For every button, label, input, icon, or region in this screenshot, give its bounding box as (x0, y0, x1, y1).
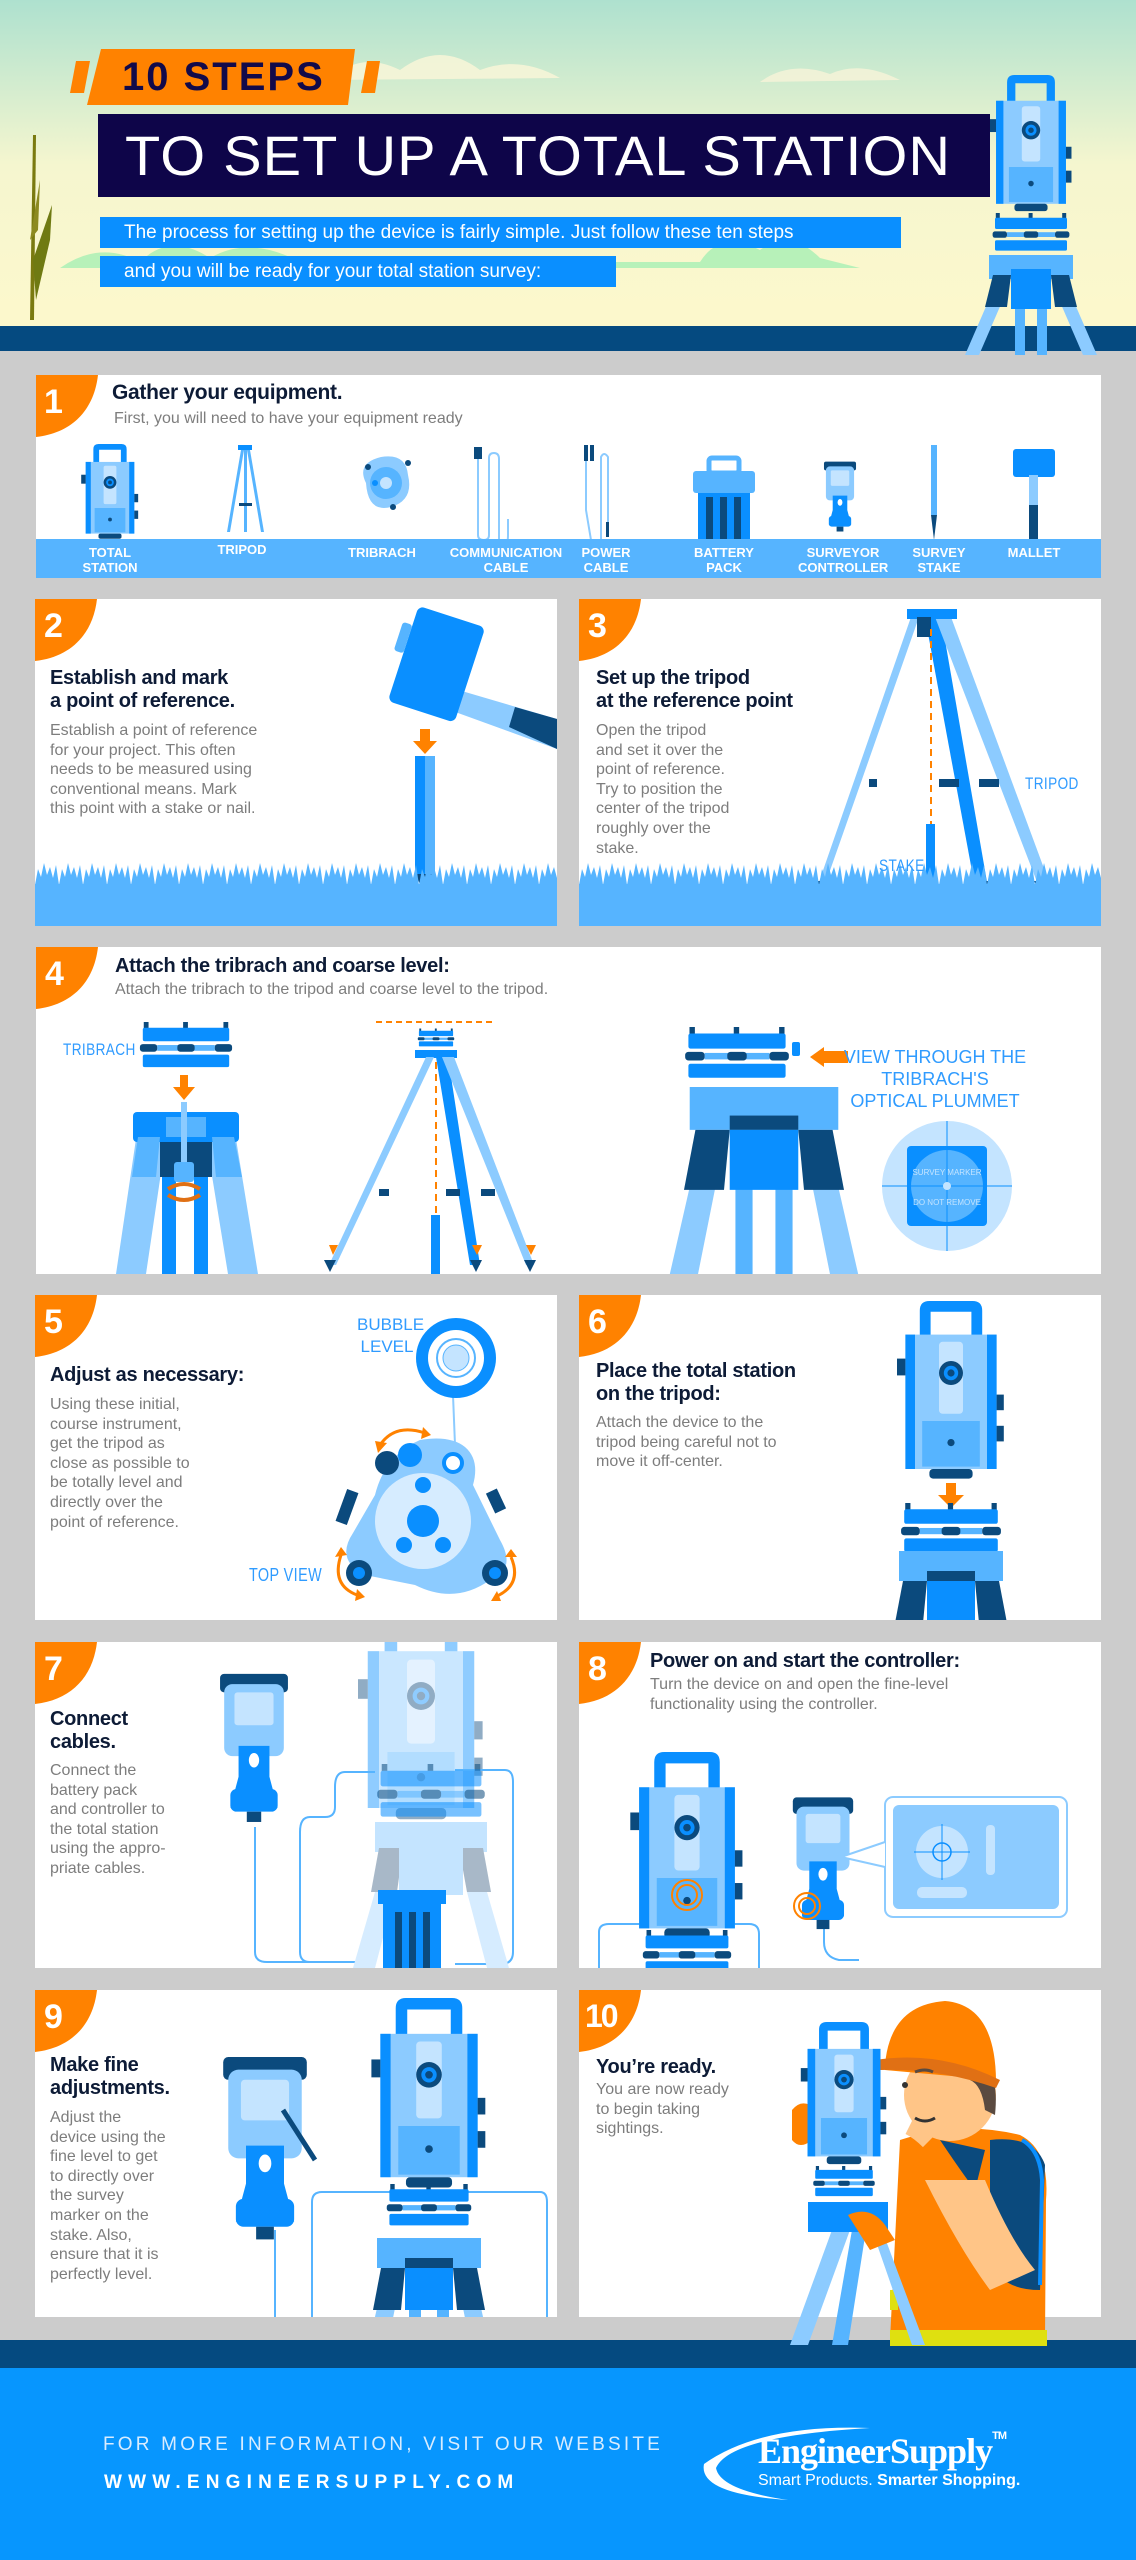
heading: Make fine (50, 2054, 138, 2076)
panel: step 5 adjust (35, 1295, 557, 1620)
body text: to begin taking (596, 2101, 700, 2118)
footer (0, 2368, 1136, 2560)
body text: stake. Also, (50, 2227, 132, 2244)
body text: needs to be measured using (50, 761, 252, 778)
logo (700, 2424, 1040, 2502)
panel: step 10 ready (579, 1990, 1101, 2317)
step number 5 (35, 1295, 97, 1357)
body text: conventional means. Mark (50, 781, 237, 798)
equipment labels: BATTERY (694, 545, 754, 560)
step number 10 (579, 1990, 641, 2052)
equipment labels: SURVEYOR (807, 545, 879, 560)
equipment labels: CABLE (584, 560, 628, 575)
subtitle: and you will be ready for your total station survey: (124, 261, 541, 282)
illustration: bubble level and tribrach top view (335, 1318, 517, 1601)
label: bubble level: LEVEL (361, 1337, 413, 1356)
label: tribrach: TRIBRACH (63, 1040, 136, 1059)
label: optical plummet: VIEW THROUGH THE (844, 1047, 1026, 1067)
body text: point of reference. (50, 1514, 179, 1531)
step number 8: 8 (588, 1650, 607, 1688)
body text: Open the tripod (596, 722, 706, 739)
footer text: FOR MORE INFORMATION, VISIT OUR WEBSITE (103, 2434, 663, 2455)
equipment labels: TRIBRACH (348, 545, 416, 560)
heading: Connect (50, 1708, 128, 1730)
header background (0, 0, 1136, 351)
body text: roughly over the (596, 820, 711, 837)
panel: step 9 fine adjustments (35, 1990, 557, 2317)
title banner: TO SET UP A TOTAL STATION (125, 124, 951, 187)
body text: marker on the (50, 2207, 149, 2224)
step number 7 (35, 1642, 97, 1704)
panel: step 7 connect cables (35, 1642, 557, 1968)
heading: Power on and start the controller: (650, 1650, 960, 1672)
body text: be totally level and (50, 1474, 183, 1491)
subtext: First, you will need to have your equipment ready (114, 410, 463, 427)
step number 6: 6 (588, 1303, 607, 1341)
body text: directly over the (50, 1494, 163, 1511)
heading: Set up the tripod (596, 667, 750, 689)
heading: Establish and mark (50, 667, 228, 689)
body text: using the appro- (50, 1840, 166, 1857)
body text: course instrument, (50, 1416, 182, 1433)
step number 8 (579, 1642, 641, 1704)
step number 2: 2 (44, 607, 63, 645)
equipment labels: SURVEY STAKE (912, 545, 966, 575)
body text: tripod being careful not to (596, 1434, 777, 1451)
label: top view: TOP VIEW (249, 1565, 322, 1585)
body text (50, 1762, 166, 1877)
heading: Place the total station (596, 1360, 796, 1382)
body text: Using these initial, (50, 1396, 180, 1413)
subtitle (100, 217, 901, 287)
illustration: tripod over stake (579, 609, 1101, 926)
logo: Smart Products. Smarter Shopping. (758, 2472, 1020, 2489)
equipment labels (82, 542, 1060, 578)
step number 6 (579, 1295, 641, 1357)
heading: Adjust as necessary: (50, 1364, 244, 1386)
body text: Adjust the (50, 2109, 121, 2126)
step number 9: 9 (44, 1998, 63, 2036)
step number 4 (36, 947, 98, 1009)
body text: functionality using the controller. (650, 1696, 878, 1713)
body text (596, 2081, 729, 2137)
equipment icons (36, 444, 1101, 578)
illustration: station, controller, screen (598, 1752, 1068, 1968)
heading (50, 2054, 170, 2099)
equipment labels: CABLE (484, 560, 528, 575)
title tag: 10 steps (70, 49, 380, 105)
heading: You’re ready. (596, 2056, 716, 2078)
label: optical plummet: OPTICAL PLUMMET (850, 1091, 1020, 1111)
body text: the total station (50, 1821, 159, 1838)
equipment labels: MALLET (1008, 545, 1060, 560)
panel: step 3 set up tripod (579, 599, 1101, 926)
illustration: controller, station, cables (220, 1642, 514, 1968)
step number 3 (579, 599, 641, 661)
heading: on the tripod: (596, 1383, 721, 1405)
label: tripod: TRIPOD (1025, 774, 1079, 793)
heading (596, 667, 793, 712)
body text (596, 1414, 777, 1470)
equipment labels: CONTROLLER (798, 560, 888, 575)
panel: step 2 establish point (35, 599, 557, 926)
label: stake: STAKE (879, 856, 925, 875)
body text: priate cables. (50, 1860, 145, 1877)
subtitle: The process for setting up the device is fairly simple. Just follow these ten steps (124, 222, 794, 243)
body text: Turn the device on and open the fine-level (650, 1676, 948, 1693)
body text: fine level to get (50, 2148, 158, 2165)
body text: Attach the tribrach to the tripod and coarse level to the tripod. (115, 981, 548, 998)
equipment labels: STATION (82, 560, 138, 575)
body text: You are now ready (596, 2081, 729, 2098)
illustration: tribrach onto tripod (116, 1021, 1012, 1274)
body text (50, 1396, 190, 1531)
panel: step 6 place total station (579, 1295, 1101, 1620)
dark band above footer (0, 2340, 1136, 2368)
body text: and set it over the (596, 742, 723, 759)
icon: grass stalk (30, 135, 52, 320)
body text: sightings. (596, 2120, 664, 2137)
illustration: controller and station (223, 1998, 548, 2317)
body text: center of the tripod (596, 800, 729, 817)
step number 1 (36, 375, 98, 437)
equipment labels: COMMUNICATION (450, 545, 562, 560)
step number 1: 1 (44, 383, 63, 421)
step number 9 (35, 1990, 97, 2052)
body text: close as possible to (50, 1455, 190, 1472)
illustration: tribrach onto tripod: SURVEY MARKER (912, 1168, 982, 1177)
label: bubble level: BUBBLE (357, 1315, 424, 1334)
body text: point of reference. (596, 761, 725, 778)
heading: Gather your equipment. (112, 381, 342, 404)
panel: step 4 tribrach (36, 947, 1101, 1274)
body text: stake. (596, 840, 639, 857)
panel: step 8 power on (579, 1642, 1101, 1968)
body text: this point with a stake or nail. (50, 800, 255, 817)
body text: battery pack (50, 1782, 137, 1799)
illustration: mallet and stake (35, 607, 557, 926)
body text (50, 722, 257, 817)
equipment labels: POWER (581, 545, 631, 560)
body text: and controller to (50, 1801, 165, 1818)
step number 10: 10 (585, 1998, 617, 2034)
body text: Connect the (50, 1762, 136, 1779)
title tag: 10 steps: 10 STEPS (122, 55, 325, 99)
body text (50, 2109, 166, 2283)
illustration: station onto tripod (896, 1301, 1006, 1620)
body text: Attach the device to the (596, 1414, 763, 1431)
heading: adjustments. (50, 2077, 170, 2099)
heading: cables. (50, 1731, 116, 1753)
step number 4: 4 (45, 955, 64, 993)
equipment labels: TRIPOD (217, 542, 267, 557)
body text: get the tripod as (50, 1435, 165, 1452)
label: bubble level (357, 1315, 424, 1356)
logo: EngineerSupplyTM (758, 2430, 1006, 2471)
step number 3: 3 (588, 607, 607, 645)
body text: ensure that it is (50, 2246, 158, 2263)
body text: device using the (50, 2129, 166, 2146)
heading (50, 667, 235, 712)
step number 2 (35, 599, 97, 661)
label: optical plummet (844, 1047, 1026, 1111)
body text: move it off-center. (596, 1453, 723, 1470)
body text (650, 1676, 948, 1713)
heading: at the reference point (596, 690, 793, 712)
step number 5: 5 (44, 1303, 63, 1341)
heading: a point of reference. (50, 690, 235, 712)
step number 7: 7 (44, 1650, 63, 1688)
heading (50, 1708, 128, 1753)
website url: WWW.ENGINEERSUPPLY.COM (104, 2472, 519, 2493)
body text: to directly over (50, 2168, 154, 2185)
heading: Attach the tribrach and coarse level: (115, 955, 450, 977)
equipment labels: PACK (706, 560, 742, 575)
body text: for your project. This often (50, 742, 236, 759)
body text: Try to position the (596, 781, 723, 798)
panel: step 1 gather equipment (36, 375, 1101, 578)
body text: perfectly level. (50, 2266, 152, 2283)
header total station illustration (965, 75, 1097, 355)
body text (596, 722, 729, 857)
body text: Establish a point of reference (50, 722, 257, 739)
illustration: tribrach onto tripod: DO NOT REMOVE (913, 1198, 981, 1207)
label: optical plummet: TRIBRACH'S (881, 1069, 989, 1089)
equipment labels: TOTAL (89, 545, 131, 560)
body text: the survey (50, 2187, 124, 2204)
heading (596, 1360, 796, 1405)
